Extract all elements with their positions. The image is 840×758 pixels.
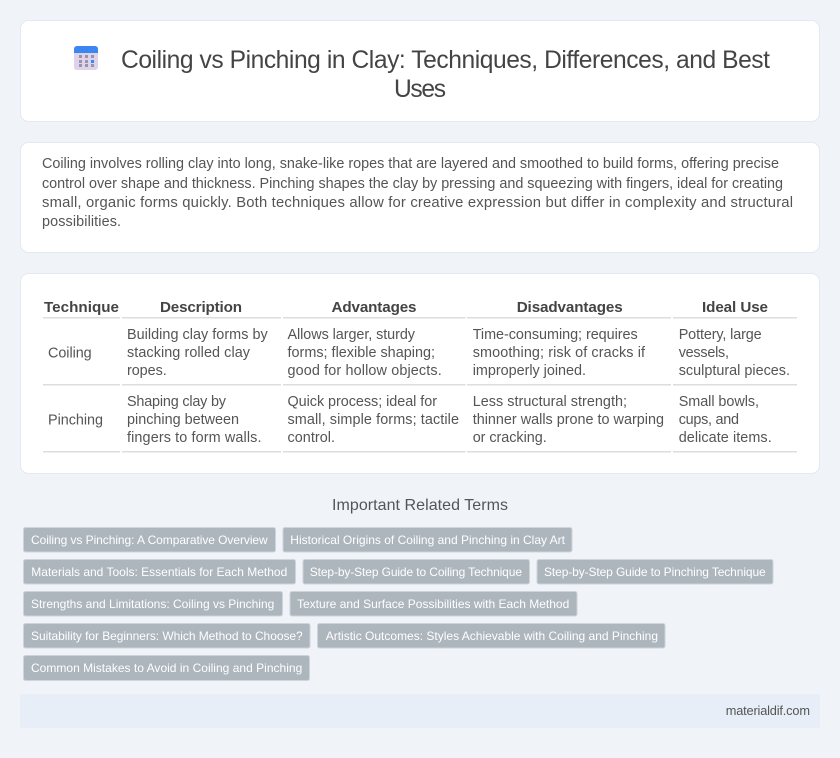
table row: pinching: Small bowls, <box>679 394 759 410</box>
table row: pinching: delicate items. <box>679 430 772 446</box>
table row: coiling: Time-consuming; requires <box>473 327 638 343</box>
tag <box>24 528 276 552</box>
table row: pinching: or cracking. <box>473 430 547 446</box>
icon: calendar <box>74 46 98 70</box>
panel: footer <box>20 694 820 728</box>
tag <box>303 560 530 584</box>
tag: Artistic Outcomes: Styles Achievable with Coiling and Pinching <box>326 629 658 643</box>
intro paragraph: small, organic forms quickly. Both techniques allow for creative expression but differ in complexity and structural <box>42 195 793 211</box>
table row: pinching: Less structural strength; <box>473 394 627 410</box>
title: Coiling vs Pinching in Clay: Techniques, Differences, and Best <box>121 47 770 74</box>
tag <box>290 592 577 616</box>
tag: Texture and Surface Possibilities with Each Method <box>297 597 569 611</box>
table row: coiling: forms; flexible shaping; <box>288 345 435 361</box>
table row: coiling: Coiling <box>48 346 92 362</box>
table row: coiling: improperly joined. <box>473 363 586 379</box>
table row: coiling: stacking rolled clay <box>127 345 251 361</box>
table header: Advantages <box>332 299 416 316</box>
intro paragraph: Coiling involves rolling clay into long, snake-like ropes that are layered and smoothed to build forms, offering precise <box>42 156 779 172</box>
table row: pinching: Shaping clay by <box>127 394 227 410</box>
table row: pinching: thinner walls prone to warping <box>473 412 664 428</box>
table row: coiling: Pottery, large <box>679 327 762 343</box>
table header: Description <box>160 299 242 316</box>
intro paragraph <box>42 156 793 230</box>
table header: Technique <box>44 299 119 316</box>
table row: pinching: control. <box>288 430 335 446</box>
tag: Coiling vs Pinching: A Comparative Overview <box>31 533 268 547</box>
table row: coiling: good for hollow objects. <box>288 363 442 379</box>
intro paragraph: control over shape and thickness. Pinching shapes the clay by pressing and squeezing with fingers, ideal for creating <box>42 176 783 192</box>
table row: pinching: fingers to form walls. <box>127 430 262 446</box>
tag <box>318 624 665 648</box>
table header <box>43 299 797 318</box>
heading: related terms: Important Related Terms <box>332 497 508 514</box>
footer source text: materialdif.com <box>726 703 810 718</box>
panel: introduction <box>20 142 820 252</box>
tag: Suitability for Beginners: Which Method to Choose? <box>31 629 303 643</box>
table row: pinching: cups, and <box>679 412 739 428</box>
tag: Materials and Tools: Essentials for Each Method <box>31 565 287 579</box>
panel: comparison table <box>20 274 820 474</box>
table row: coiling <box>43 327 797 386</box>
table row: pinching <box>43 394 797 452</box>
table header: Disadvantages <box>517 299 623 316</box>
table row: coiling: vessels, <box>679 345 729 361</box>
tag <box>24 560 296 584</box>
tag <box>283 528 572 552</box>
panel: title card <box>20 20 820 122</box>
table row: coiling: smoothing; risk of cracks if <box>473 345 646 361</box>
table row: pinching: Quick process; ideal for <box>288 394 437 410</box>
table row: coiling: Allows larger, sturdy <box>288 327 416 343</box>
tag <box>24 624 310 648</box>
table row: pinching: Pinching <box>48 412 103 428</box>
title: Uses <box>394 76 446 103</box>
tag <box>24 592 282 616</box>
tag: Step-by-Step Guide to Pinching Technique <box>544 565 766 579</box>
table row: pinching: small, simple forms; tactile <box>288 412 459 428</box>
table row: coiling: ropes. <box>127 363 167 379</box>
table row: pinching: pinching between <box>127 412 239 428</box>
tag <box>537 560 773 584</box>
table header: Ideal Use <box>702 299 768 316</box>
tag <box>24 656 310 680</box>
panel: related term tags <box>24 528 773 680</box>
tag: Step-by-Step Guide to Coiling Technique <box>310 565 522 579</box>
table row: coiling: sculptural pieces. <box>679 363 790 379</box>
intro paragraph: possibilities. <box>42 214 121 230</box>
tag: Common Mistakes to Avoid in Coiling and Pinching <box>31 661 302 675</box>
title <box>121 47 770 103</box>
tag: Strengths and Limitations: Coiling vs Pinching <box>31 597 274 611</box>
table row: coiling: Building clay forms by <box>127 327 268 343</box>
tag: Historical Origins of Coiling and Pinching in Clay Art <box>290 533 566 547</box>
